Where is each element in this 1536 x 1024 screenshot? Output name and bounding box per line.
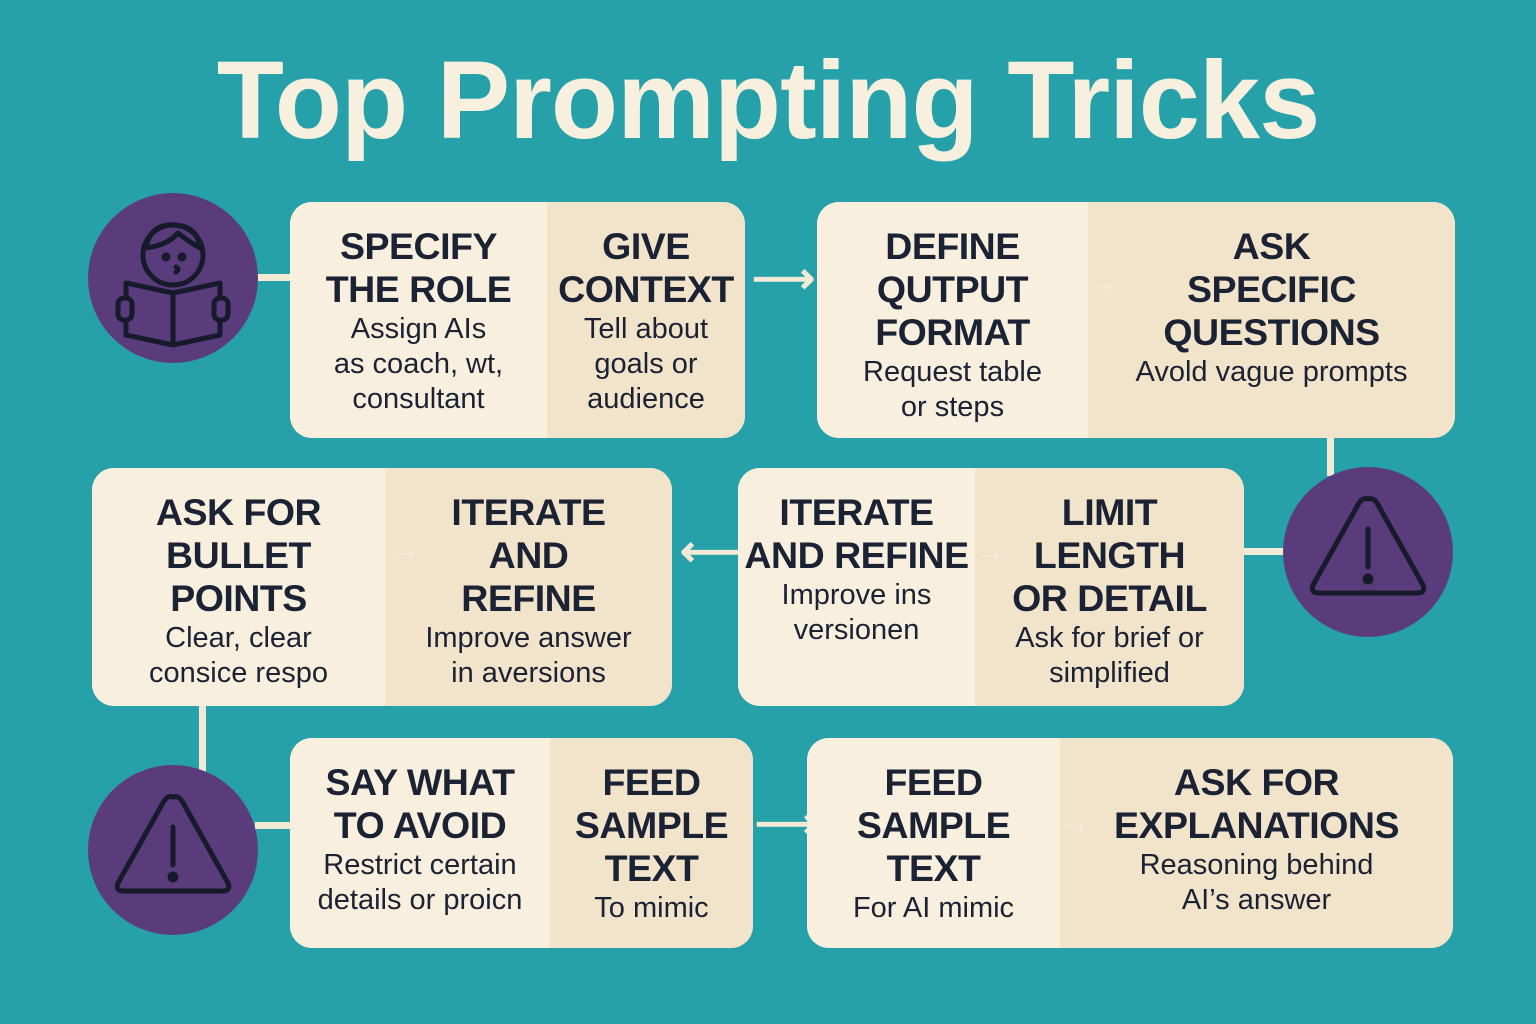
card: iterate / limit length: Improve ins bbox=[782, 579, 931, 611]
card: iterate / limit length bbox=[738, 468, 1244, 706]
card: specify role / give context: Tell about bbox=[584, 313, 708, 345]
card: feed sample / ask explanations: SAMPLE bbox=[857, 804, 1010, 846]
card: say what to avoid / feed sample: To mimic bbox=[594, 892, 709, 924]
card: say what to avoid / feed sample: TO AVOID bbox=[334, 804, 506, 846]
card: say what to avoid / feed sample: details or proicn bbox=[318, 884, 522, 916]
card: ask for bullets / iterate: ITERATE bbox=[451, 491, 606, 533]
card: ask for bullets / iterate: POINTS bbox=[170, 577, 307, 619]
card: iterate / limit length: LIMIT bbox=[1062, 491, 1157, 533]
card: feed sample / ask explanations: AI’s answer bbox=[1182, 884, 1331, 916]
card: feed sample / ask explanations bbox=[807, 738, 1453, 948]
card: specify role / give context: consultant bbox=[352, 383, 485, 415]
card: ask for bullets / iterate: ASK FOR bbox=[156, 491, 321, 533]
card: define output / ask specific: SPECIFIC bbox=[1187, 268, 1356, 310]
card: ask for bullets / iterate: AND bbox=[489, 534, 568, 576]
card: iterate / limit length: LENGTH bbox=[1034, 534, 1185, 576]
card: specify role / give context: GIVE bbox=[602, 225, 690, 267]
card: ask for bullets / iterate: BULLET bbox=[166, 534, 311, 576]
card: define output / ask specific: ASK bbox=[1233, 225, 1310, 267]
card: ask for bullets / iterate: consice respo bbox=[149, 657, 328, 689]
card: say what to avoid / feed sample: FEED bbox=[602, 761, 700, 803]
card: specify role / give context: SPECIFY bbox=[340, 225, 497, 267]
card: ask for bullets / iterate: REFINE bbox=[461, 577, 596, 619]
card: iterate / limit length: versionen bbox=[794, 614, 919, 646]
card: specify role / give context: Assign AIs bbox=[351, 313, 486, 345]
card: feed sample / ask explanations: EXPLANATIONS bbox=[1114, 804, 1399, 846]
card: iterate / limit length: AND REFINE bbox=[744, 534, 969, 576]
card: say what to avoid / feed sample: SAMPLE bbox=[575, 804, 728, 846]
card: specify role / give context: goals or bbox=[594, 348, 698, 380]
card: specify role / give context: as coach, wt, bbox=[334, 348, 503, 380]
text: → bbox=[1088, 266, 1118, 299]
text: → bbox=[390, 533, 420, 566]
card: say what to avoid / feed sample: TEXT bbox=[605, 847, 698, 889]
card: define output / ask specific: Request table bbox=[863, 356, 1042, 388]
card: ask for bullets / iterate bbox=[92, 468, 672, 706]
card: specify role / give context bbox=[290, 202, 745, 438]
icon: person reading bbox=[88, 193, 258, 363]
card: feed sample / ask explanations: FEED bbox=[884, 761, 982, 803]
card: ask for bullets / iterate: in aversions bbox=[451, 657, 606, 689]
icon: warning right bbox=[1283, 467, 1453, 637]
card: iterate / limit length: ITERATE bbox=[779, 491, 934, 533]
card: say what to avoid / feed sample: Restrict certain bbox=[323, 849, 517, 881]
card: define output / ask specific: QUESTIONS bbox=[1163, 311, 1380, 353]
card: feed sample / ask explanations: TEXT bbox=[887, 847, 980, 889]
card: say what to avoid / feed sample: SAY WHAT bbox=[325, 761, 515, 803]
title: Top Prompting Tricks bbox=[217, 39, 1319, 162]
connector lines bbox=[255, 274, 295, 281]
card: ask for bullets / iterate: Clear, clear bbox=[165, 622, 312, 654]
card: iterate / limit length: OR DETAIL bbox=[1012, 577, 1207, 619]
text: → bbox=[1060, 806, 1090, 839]
card: feed sample / ask explanations: Reasoning behind bbox=[1140, 849, 1373, 881]
card: feed sample / ask explanations: ASK FOR bbox=[1174, 761, 1339, 803]
card: iterate / limit length: simplified bbox=[1049, 657, 1170, 689]
card: iterate / limit length: Ask for brief or bbox=[1015, 622, 1204, 654]
card: define output / ask specific: Avold vague prompts bbox=[1136, 356, 1407, 388]
card: define output / ask specific: or steps bbox=[901, 391, 1004, 423]
card: ask for bullets / iterate: Improve answer bbox=[425, 622, 632, 654]
arrow: ⟶ bbox=[755, 799, 818, 848]
icon: warning left bbox=[88, 765, 258, 935]
card: specify role / give context: THE ROLE bbox=[326, 268, 511, 310]
arrow: ⟶ bbox=[752, 254, 815, 303]
arrow left: ⟵ bbox=[680, 527, 743, 576]
card: specify role / give context: audience bbox=[587, 383, 705, 415]
card: define output / ask specific: QUTPUT bbox=[877, 268, 1028, 310]
card: feed sample / ask explanations: For AI mimic bbox=[853, 892, 1014, 924]
card: define output / ask specific: FORMAT bbox=[875, 311, 1030, 353]
card: say what to avoid / feed sample bbox=[290, 738, 753, 948]
text: → bbox=[975, 535, 1005, 568]
card: specify role / give context: CONTEXT bbox=[558, 268, 734, 310]
card: define output / ask specific bbox=[817, 202, 1455, 438]
card: define output / ask specific: DEFINE bbox=[885, 225, 1020, 267]
